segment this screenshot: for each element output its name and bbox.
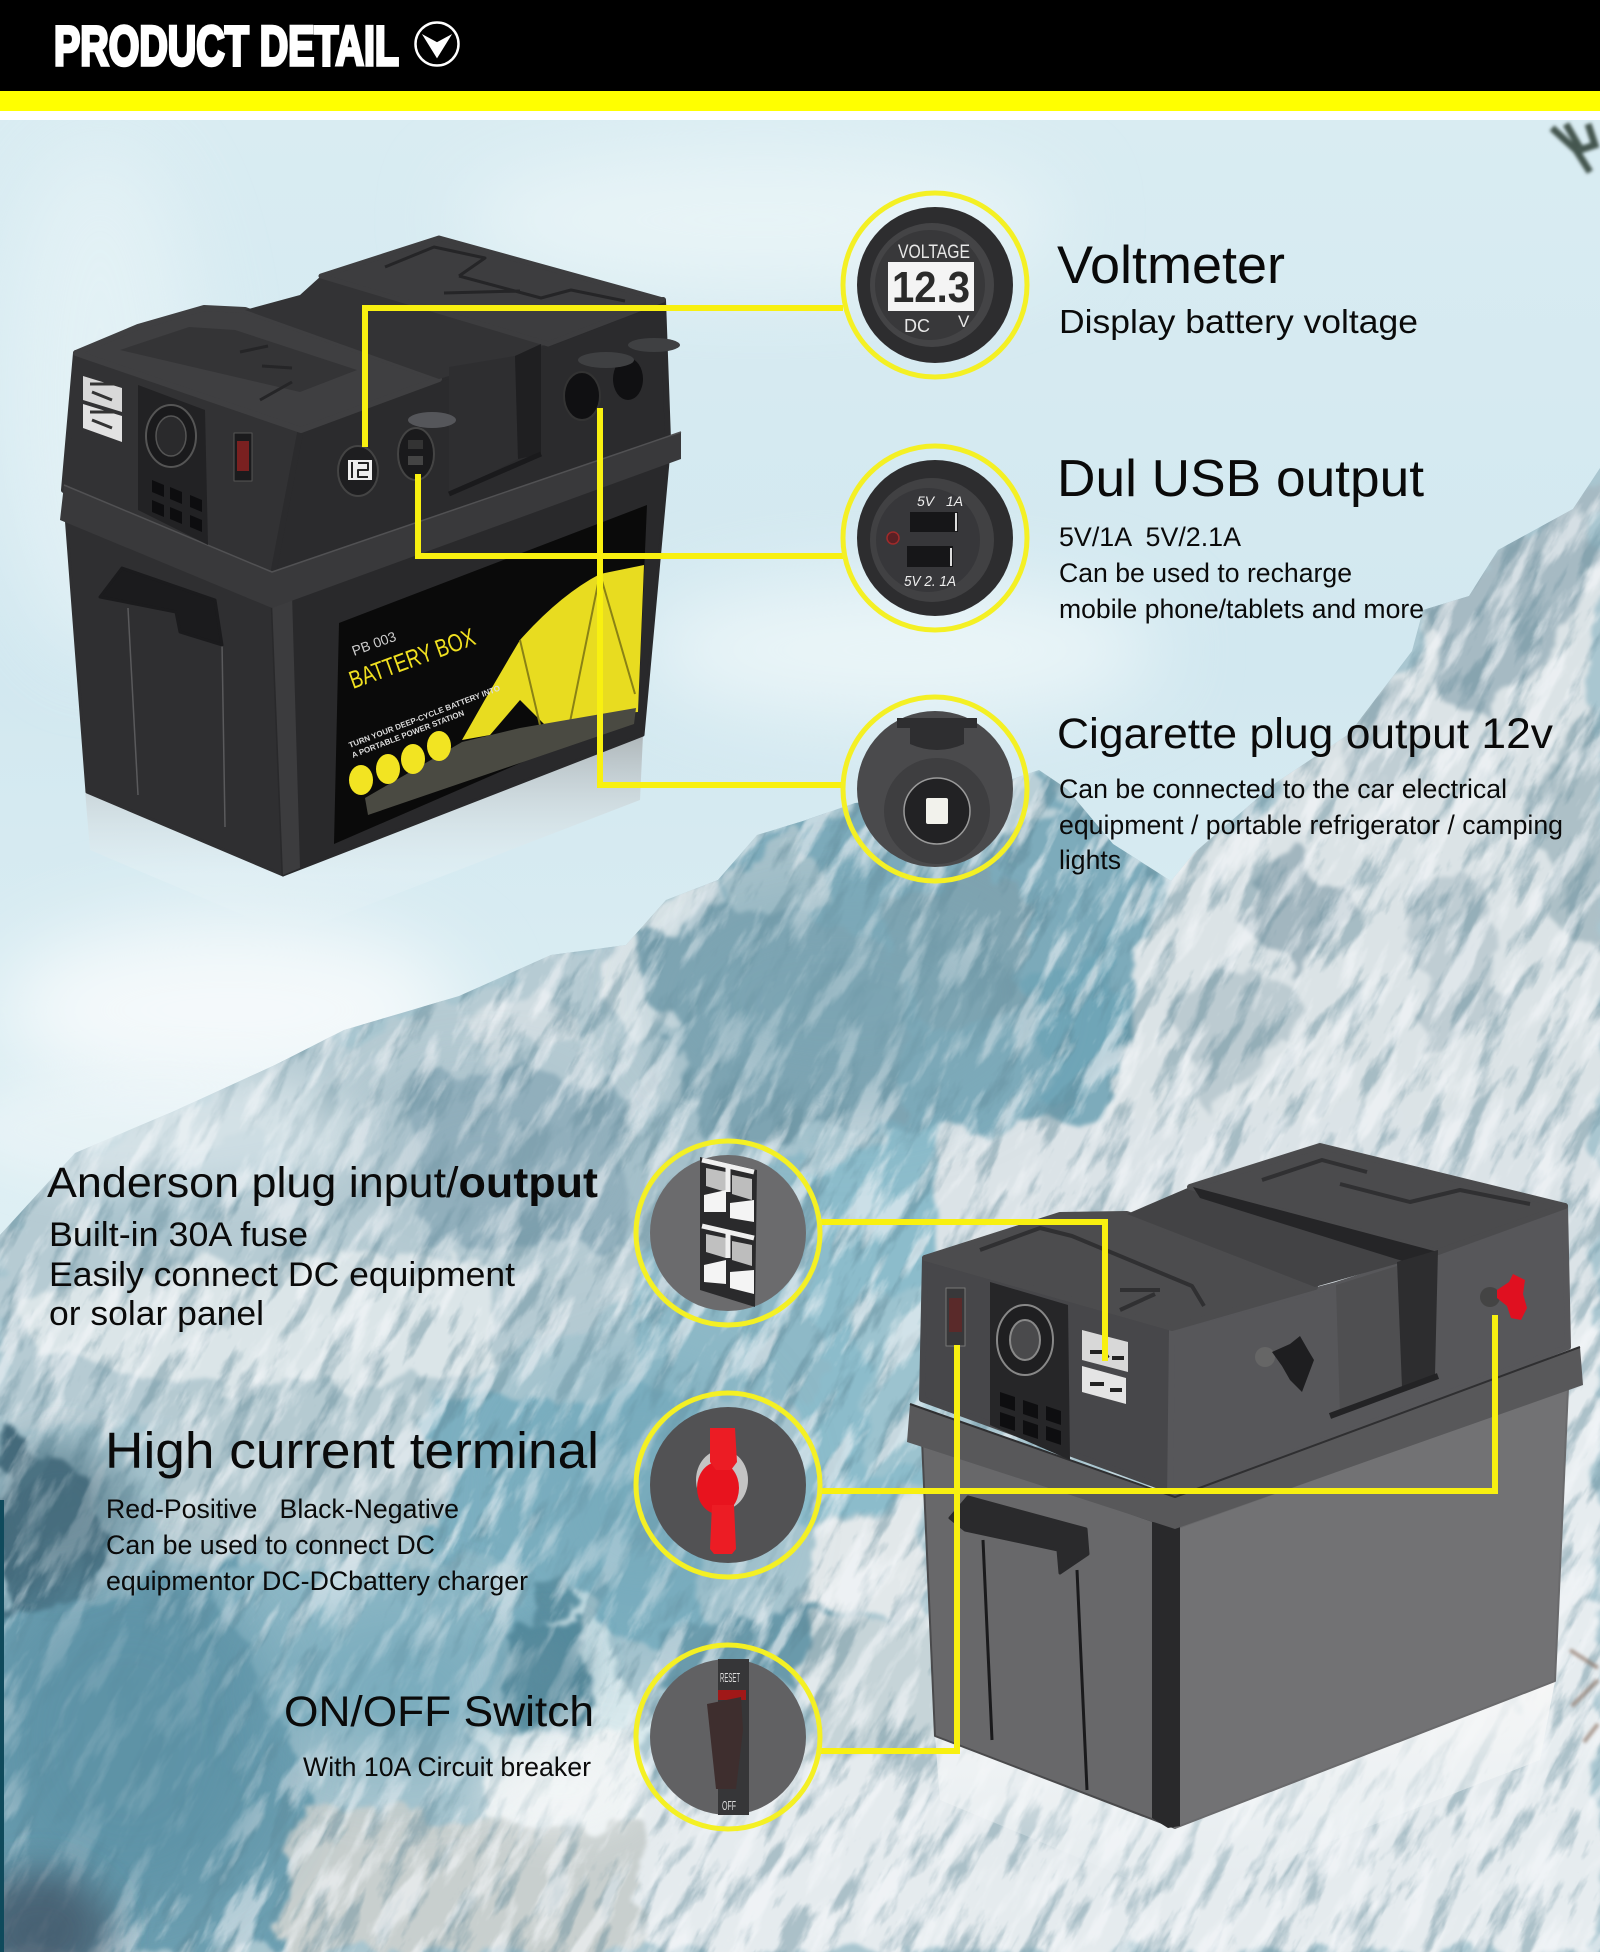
- text block: high current terminal: equipmentor DC-DCbattery charger: [106, 1566, 528, 1596]
- text block: high current terminal: [105, 1422, 599, 1596]
- poster heading: BATTERY BOX: [345, 623, 479, 695]
- strap recess: [449, 356, 518, 494]
- icon: chevron in circle: [416, 22, 458, 66]
- black terminal: [1255, 1336, 1314, 1392]
- text block: cigarette plug: lights: [1059, 845, 1121, 875]
- callout: USB circle: 5V 2. 1A: [904, 573, 956, 590]
- cigarette sockets: [564, 338, 680, 420]
- text block: on/off switch: ON/OFF Switch: [284, 1688, 594, 1736]
- callout: voltmeter circle: VOLTAGE: [898, 242, 970, 263]
- text block: USB output: Dul USB output: [1057, 450, 1425, 508]
- text block: Anderson plug: Easily connect DC equipment: [49, 1256, 516, 1294]
- handle: [950, 1497, 1088, 1573]
- callout: on/off switch circle: [636, 1645, 820, 1829]
- text block: USB output: 5V/1A 5V/2.1A: [1059, 522, 1241, 552]
- callout: red terminal circle: [636, 1393, 820, 1577]
- cooling fan and vents: [990, 1282, 1070, 1460]
- callout: voltmeter circle: DC: [904, 316, 930, 336]
- bottom snow: [280, 1810, 660, 1952]
- USB socket: [398, 412, 456, 480]
- poster heading: [345, 623, 479, 695]
- text block: high current terminal: High current terminal: [105, 1422, 599, 1479]
- box body: [66, 462, 668, 875]
- callout: USB circle: 1A: [946, 493, 963, 509]
- strap recess: [1336, 1266, 1402, 1415]
- callout: voltmeter circle: [843, 193, 1027, 377]
- snow streak and dark teal patches: [546, 1586, 654, 1747]
- rim: [907, 1347, 1583, 1529]
- poster caption: TURN YOUR DEEP-CYCLE BATTERY INTO: [347, 684, 501, 750]
- text block: Anderson plug: [47, 1159, 598, 1333]
- rim: [60, 432, 681, 608]
- side handle: [100, 568, 222, 645]
- rocker switch: [946, 1288, 965, 1346]
- text block: Anderson plug: Anderson plug input/ output: [47, 1159, 598, 1207]
- battery box poster: [334, 505, 647, 844]
- callout: USB circle: [843, 446, 1027, 630]
- text block: voltmeter: Display battery voltage: [1059, 303, 1418, 340]
- Anderson connectors: [1082, 1330, 1128, 1404]
- poster caption: A PORTABLE POWER STATION: [350, 708, 466, 760]
- twig top right: [1552, 124, 1598, 172]
- teal right of left circles: [800, 1130, 930, 1520]
- cooling fan and vents: [138, 385, 208, 545]
- poster feature icons: [349, 731, 451, 795]
- text block: cigarette plug: Cigarette plug output 12v: [1057, 710, 1554, 758]
- left dark trees: [0, 1430, 110, 1640]
- callout lines: [365, 308, 1495, 1751]
- box lid: [60, 238, 681, 608]
- red terminal: [1480, 1274, 1527, 1320]
- upper battery box: [60, 238, 681, 875]
- callout: cigarette plug circle: [843, 697, 1027, 881]
- box body: [922, 1388, 1568, 1828]
- callout: USB circle: 5V: [917, 493, 936, 509]
- callout: on/off switch circle: OFF: [722, 1798, 736, 1813]
- tent: [462, 565, 644, 740]
- text block: on/off switch: [284, 1688, 594, 1782]
- rocker switch: [234, 433, 252, 481]
- text block: USB output: [1057, 450, 1425, 624]
- callout: voltmeter circle: V: [958, 312, 970, 331]
- text block: Anderson plug: or solar panel: [49, 1295, 264, 1333]
- text block: USB output: mobile phone/tablets and more: [1059, 594, 1424, 624]
- text block: high current terminal: Can be used to connect DC: [106, 1530, 435, 1560]
- poster heading: PB 003: [350, 628, 398, 659]
- tonal correction: [0, 1570, 280, 1910]
- reflection under upper battery box: [85, 735, 643, 935]
- text block: cigarette plug: [1057, 710, 1563, 875]
- text block: Anderson plug: Built-in 30A fuse: [49, 1216, 308, 1254]
- text block: voltmeter: Voltmeter: [1057, 236, 1285, 295]
- Anderson connectors: [83, 376, 122, 442]
- callout: on/off switch circle: RESET: [720, 1670, 740, 1685]
- central teal mountain: [690, 770, 1171, 1150]
- callout: voltmeter circle: 12.3: [892, 263, 970, 312]
- reflection under lower battery box: [935, 1681, 1555, 1900]
- upper area around lower box: [930, 1100, 1600, 1300]
- text block: cigarette plug: equipment / portable refrigerator / camping: [1059, 810, 1563, 840]
- header bar: [0, 0, 1600, 120]
- text block: USB output: Can be used to recharge: [1059, 558, 1352, 588]
- lower centre teal: [430, 1390, 720, 1640]
- right snow mountain: [1102, 564, 1600, 1132]
- text block: voltmeter: [1057, 236, 1418, 340]
- snow band: [20, 1250, 500, 1400]
- lower battery box: [907, 1146, 1583, 1828]
- text block: on/off switch: With 10A Circuit breaker: [303, 1752, 591, 1782]
- callout: Anderson circle: [636, 1141, 820, 1325]
- lower left: [0, 1560, 310, 1952]
- text block: cigarette plug: Can be connected to the car electrical: [1059, 774, 1507, 804]
- box lid: [907, 1146, 1583, 1529]
- text block: high current terminal: Red-Positive Black-Negative: [106, 1494, 459, 1524]
- voltmeter: [338, 446, 378, 496]
- left upper mountain: [0, 880, 760, 1430]
- heading: product detail: PRODUCT DETAIL: [54, 14, 399, 77]
